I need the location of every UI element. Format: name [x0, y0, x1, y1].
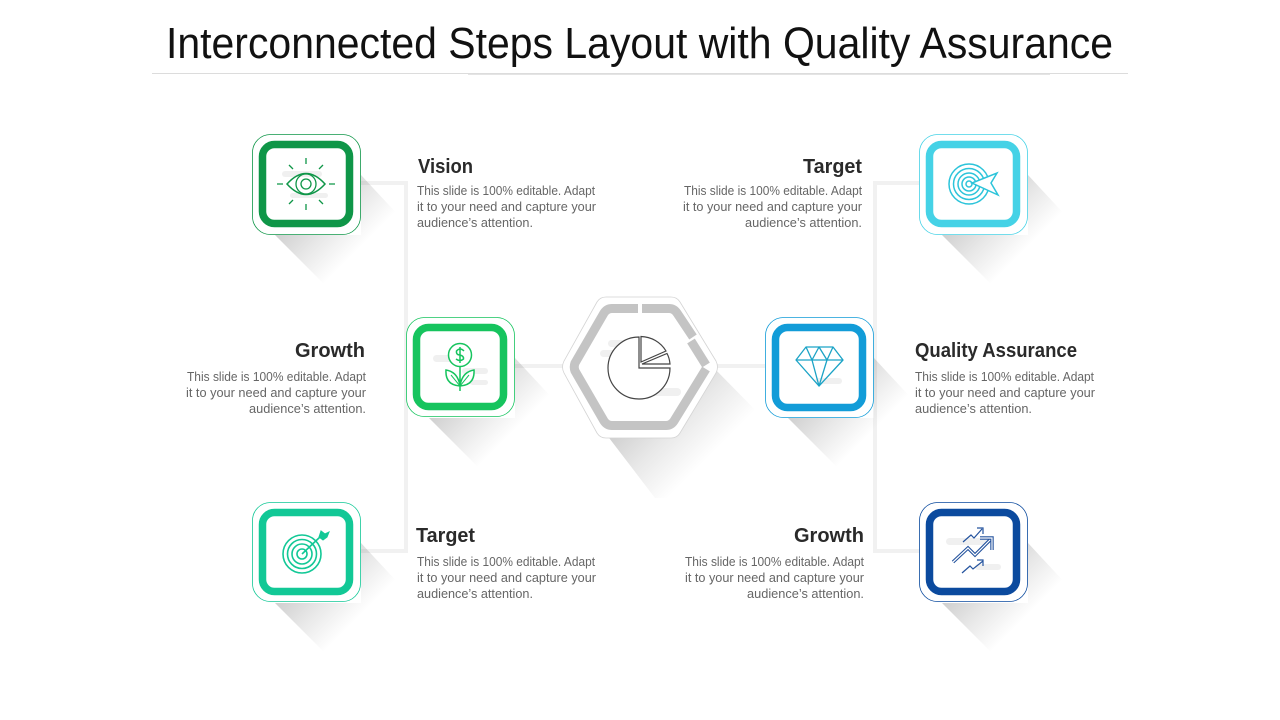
- title: Interconnected Steps Layout with Quality Assurance: [166, 19, 1113, 68]
- icon: diamond: [796, 347, 843, 386]
- panel: growth plant step: [406, 318, 554, 468]
- icon: target with arrow: [949, 164, 998, 204]
- text block: growth left: audience’s attention.: [249, 402, 366, 416]
- text block: vision: [417, 156, 596, 230]
- panel: quality assurance step: [766, 318, 913, 468]
- text block: target right: This slide is 100% editable. Adapt: [684, 184, 863, 198]
- text block: growth left: This slide is 100% editable. Adapt: [187, 370, 367, 384]
- panel: growth step bottom right: [920, 502, 1067, 653]
- text block: quality assurance: it to your need and capture your: [915, 386, 1095, 400]
- text block: target right: [683, 156, 863, 230]
- text block: vision: it to your need and capture your: [417, 200, 596, 214]
- text block: vision: Vision: [418, 156, 473, 178]
- icon: rising arrows: [946, 528, 1001, 573]
- text block: target left: audience’s attention.: [417, 587, 533, 601]
- text block: target left: it to your need and capture your: [417, 571, 596, 585]
- icon: dollar plant: [433, 344, 488, 391]
- text block: growth left: it to your need and capture your: [186, 386, 366, 400]
- text block: quality assurance: audience’s attention.: [915, 402, 1032, 416]
- hexagon ring: [574, 308, 706, 426]
- text block: growth right: Growth: [794, 525, 864, 547]
- text block: growth left: [186, 340, 367, 416]
- text block: growth right: it to your need and capture your: [685, 571, 864, 585]
- panel: target step bottom left: [252, 502, 400, 653]
- text block: target left: This slide is 100% editable. Adapt: [417, 555, 596, 569]
- icon: target with dart: [283, 531, 329, 573]
- text block: target left: Target: [416, 525, 475, 547]
- icon: eye: [277, 158, 335, 210]
- icon: pie chart: [600, 336, 681, 399]
- text block: target right: Target: [803, 156, 862, 178]
- text block: quality assurance: [915, 340, 1095, 416]
- text block: quality assurance: This slide is 100% editable. Adapt: [915, 370, 1095, 384]
- text block: growth right: audience’s attention.: [747, 587, 864, 601]
- text block: target right: audience’s attention.: [745, 216, 862, 230]
- connector lines: [361, 183, 919, 551]
- text block: quality assurance: Quality Assurance: [915, 340, 1077, 362]
- text block: growth right: [685, 525, 865, 601]
- panel: center hexagon: [562, 297, 770, 498]
- text block: target right: it to your need and capture your: [683, 200, 862, 214]
- text block: target left: [416, 525, 596, 601]
- panel: target step top right: [920, 134, 1067, 285]
- panel: vision step: [252, 134, 400, 285]
- text block: growth left: Growth: [295, 340, 365, 362]
- text block: growth right: This slide is 100% editable. Adapt: [685, 555, 865, 569]
- text block: vision: audience’s attention.: [417, 216, 533, 230]
- text block: vision: This slide is 100% editable. Adapt: [417, 184, 596, 198]
